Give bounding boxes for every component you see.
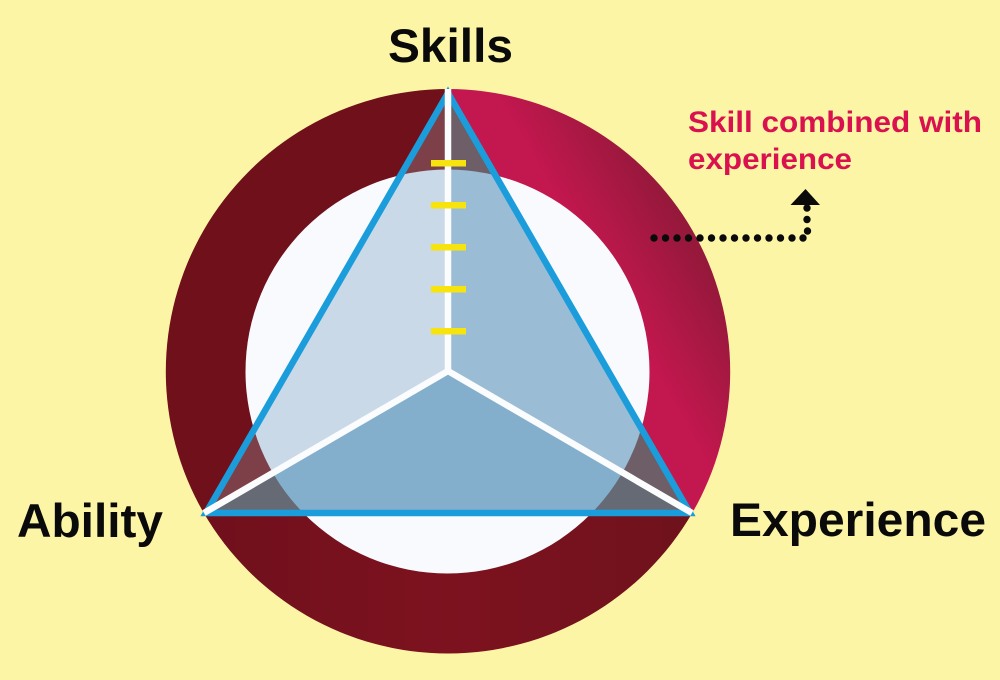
triangle faces inside circle — [256, 170, 640, 510]
callout text — [688, 106, 982, 176]
inner white circle — [246, 170, 650, 574]
callout text: experience — [688, 143, 852, 176]
ring segment: ability to skills — [166, 89, 448, 513]
dotted arrow to callout — [650, 189, 820, 242]
ring segment: ability to experience — [204, 372, 692, 653]
ring segment: skill combined with experience — [448, 89, 730, 513]
label: Ability: Ability — [17, 495, 164, 548]
label: Skills: Skills — [388, 20, 513, 73]
triangle corners over ring — [205, 90, 692, 513]
circle ring — [166, 89, 730, 653]
yellow scale ticks — [431, 160, 466, 334]
white spokes — [204, 89, 692, 513]
triangle blue outline — [206, 93, 690, 513]
callout text: Skill combined with — [688, 106, 982, 139]
label: Experience: Experience — [730, 494, 986, 547]
triangle — [204, 89, 692, 513]
